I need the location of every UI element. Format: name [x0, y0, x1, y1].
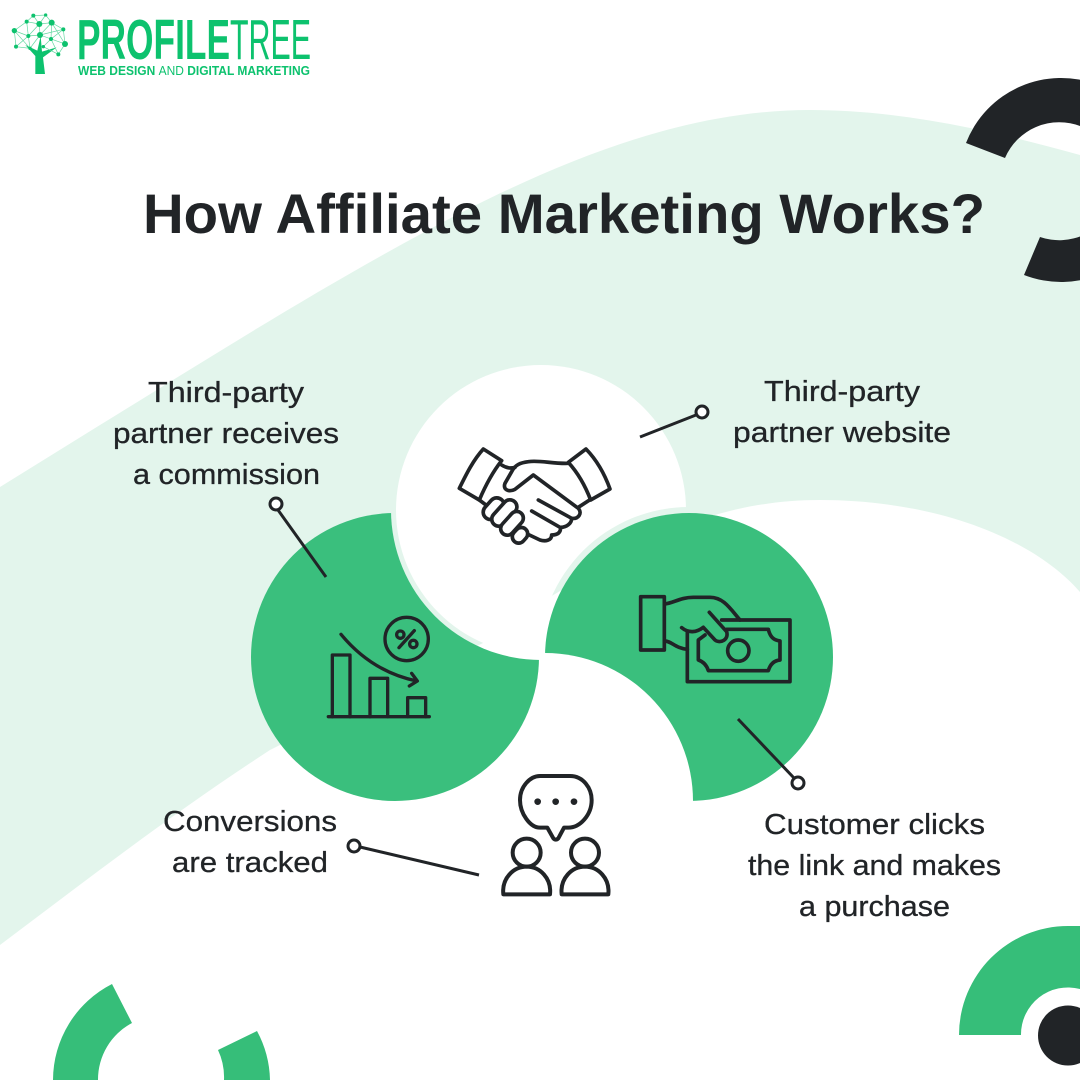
circle: green left [251, 513, 539, 801]
label text: a commission [133, 459, 320, 491]
label text [163, 806, 337, 879]
logo tagline: WEB DESIGN AND DIGITAL MARKETING [78, 64, 310, 78]
label text: partner receives [113, 418, 339, 450]
label text [113, 377, 339, 491]
icon: falling bars with percent [328, 617, 429, 717]
label text: the link and makes [748, 850, 1001, 882]
decorative dark arc top right [966, 78, 1080, 282]
connector [738, 719, 804, 789]
label text: a purchase [799, 891, 950, 923]
decorative green arc bottom right [959, 926, 1080, 1035]
connector [270, 498, 326, 577]
label text: are tracked [172, 847, 328, 879]
logo wordmark: PROFILE [77, 8, 230, 72]
label text [748, 809, 1001, 923]
icon: handshake [459, 449, 610, 546]
decorative dark dot bottom right [1038, 1006, 1080, 1066]
callout: customer clicks [738, 719, 1001, 923]
label text: Third-party [148, 377, 305, 409]
logo: ProfileTree [12, 8, 311, 78]
title: How Affiliate Marketing Works? [143, 182, 985, 245]
decorative green arc bottom left [53, 984, 270, 1080]
callout: partner website [640, 376, 951, 449]
callout: commission [113, 377, 339, 577]
logo wordmark light: TREE [230, 8, 311, 72]
label text: partner website [733, 417, 951, 449]
label text [733, 376, 951, 449]
label text: Conversions [163, 806, 337, 838]
label text: Third-party [764, 376, 921, 408]
icon: hand with money [641, 597, 790, 682]
label text: Customer clicks [764, 809, 985, 841]
background: pale green wave [0, 110, 1080, 945]
connector [640, 406, 708, 437]
connector [348, 840, 479, 875]
logo tree icon [12, 13, 68, 74]
circle: white handshake [396, 365, 686, 655]
callout: conversions [163, 806, 479, 879]
circle: green right [545, 513, 833, 801]
icon: two people talking [503, 776, 608, 894]
